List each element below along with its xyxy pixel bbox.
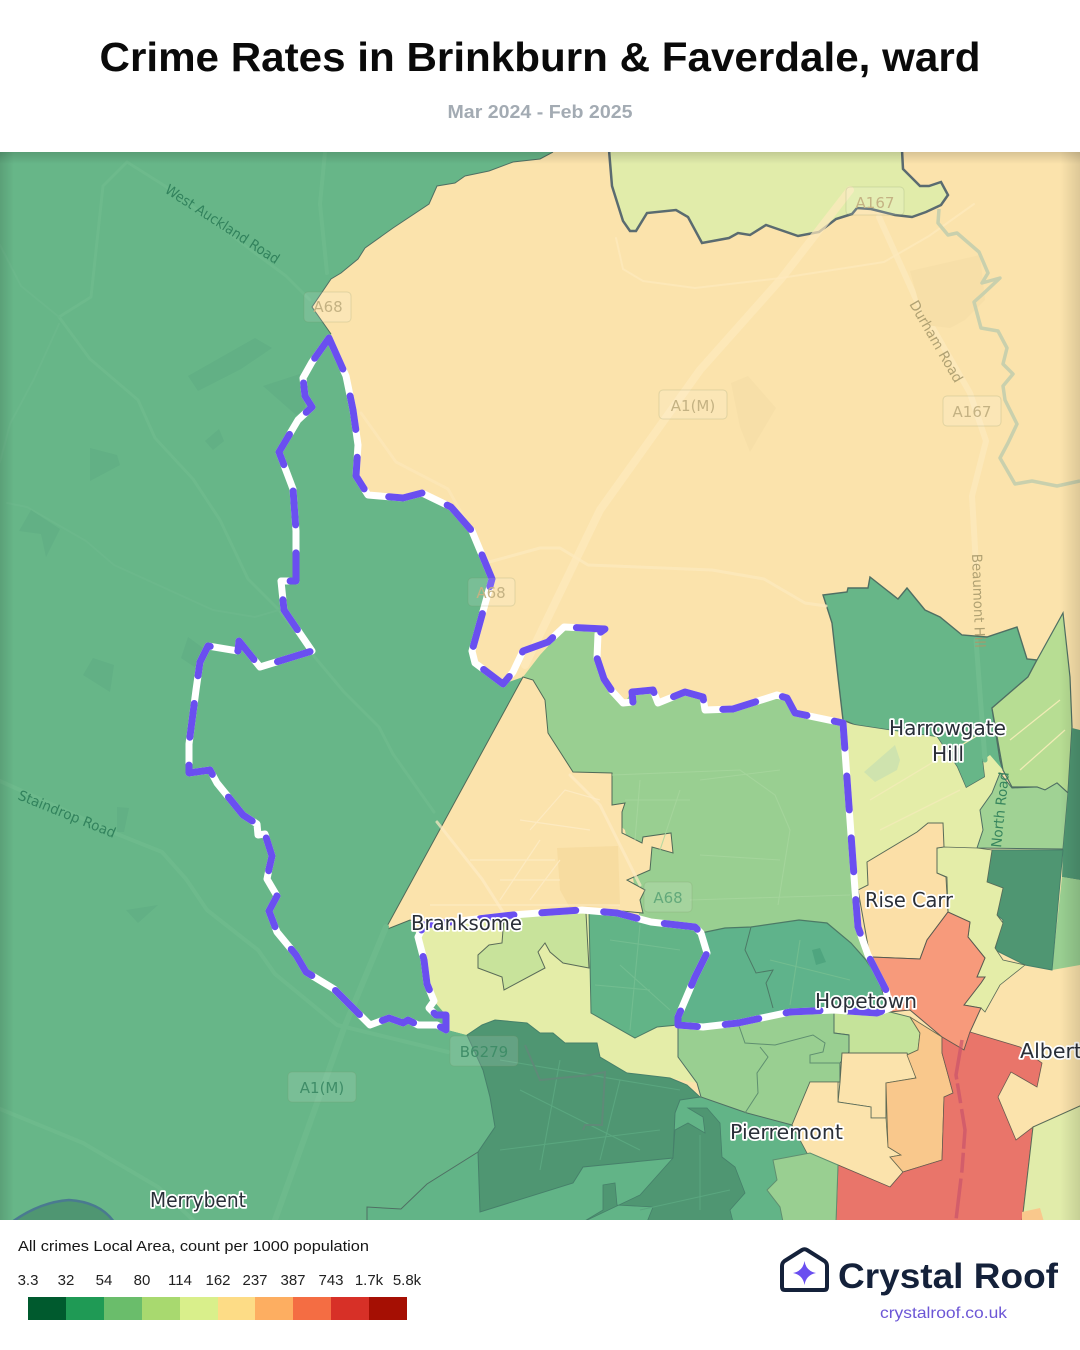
pale Branksome area	[418, 910, 697, 1083]
legend scale labels: 80	[134, 1272, 150, 1289]
peach block	[886, 1017, 953, 1172]
tan woods on cream	[916, 292, 935, 326]
cream Pierremont block	[792, 1082, 903, 1187]
mid green block	[589, 912, 707, 1038]
road shields: B6279	[460, 1043, 508, 1061]
south pale strip	[834, 1012, 920, 1055]
dark green lower area	[467, 1020, 700, 1212]
west green area	[0, 152, 553, 1220]
Pierremont north light green	[678, 1012, 849, 1125]
legend title: All crimes Local Area, count per 1000 population	[18, 1238, 369, 1255]
pale band near Rise Carr	[937, 847, 1025, 1012]
lower west sector edge	[367, 1152, 478, 1222]
river bottom left	[12, 1200, 114, 1222]
road labels: North Road	[989, 771, 1013, 848]
ward boundary	[189, 338, 890, 1030]
woods	[19, 338, 306, 923]
legend scale labels: 114	[168, 1272, 192, 1289]
Rise Carr cream	[858, 823, 948, 959]
road labels: Staindrop Road	[16, 788, 118, 842]
roads	[216, 186, 989, 1272]
north pale green area	[609, 150, 948, 243]
place labels: Hopetown	[815, 989, 917, 1013]
red town centre	[836, 1032, 1042, 1222]
legend scale labels: 1.7k	[355, 1272, 384, 1289]
North Road light green	[977, 773, 1068, 849]
logo wordmark: Crystal Roof	[838, 1257, 1058, 1296]
place labels: Branksome	[411, 911, 522, 935]
dark green east	[1062, 728, 1080, 880]
lower west sector	[480, 1098, 806, 1220]
orange polygon	[870, 912, 985, 1050]
subtitle: date range: Mar 2024 - Feb 2025	[448, 102, 632, 122]
logo icon: house with star	[782, 1249, 827, 1290]
road shields: A167	[856, 194, 894, 212]
green area northern edge	[312, 152, 553, 334]
legend scale labels: 32	[58, 1272, 74, 1289]
place labels: Rise Carr	[865, 888, 954, 912]
title: Crime Rates in Brinkburn & Faverdale, ward	[100, 34, 981, 80]
map vignette	[0, 152, 1080, 1220]
place labels: Albert	[1020, 1039, 1080, 1063]
legend scale labels: 743	[318, 1272, 344, 1289]
legend scale labels: 237	[242, 1272, 268, 1289]
Harrowgate green	[823, 577, 1037, 788]
pale Harrowgate south	[843, 722, 1003, 890]
road shields	[288, 187, 1001, 1102]
legend scale labels	[18, 1272, 422, 1289]
legend colour bar	[28, 1297, 407, 1320]
urban texture	[430, 790, 620, 905]
road shields: A1(M)	[300, 1079, 344, 1097]
stream in dark area	[525, 1045, 605, 1130]
road shields: A1(M)	[671, 397, 715, 415]
ward interior light green	[524, 630, 866, 960]
place labels	[150, 716, 1080, 1212]
railway line	[956, 1040, 965, 1220]
road shields: A167	[953, 403, 991, 421]
light green east	[992, 613, 1072, 793]
inner ward green	[678, 920, 890, 1027]
river	[938, 209, 1080, 486]
road labels: West Auckland Road	[162, 182, 282, 268]
place labels: Pierremont	[730, 1120, 843, 1144]
road shields: A68	[313, 298, 343, 316]
road shields: A68	[476, 584, 506, 602]
legend scale labels: 5.8k	[393, 1272, 422, 1289]
bottom light green	[767, 1153, 838, 1222]
place labels: Hill	[932, 742, 964, 766]
Harrowgate pond tint	[864, 745, 900, 782]
map	[0, 150, 1080, 1222]
road shields: A68	[653, 889, 683, 907]
road labels	[16, 182, 1013, 848]
cream south block	[838, 1053, 916, 1118]
place labels: Harrowgate	[889, 716, 1006, 740]
road labels: Beaumont Hill	[968, 554, 987, 648]
legend scale labels: 387	[280, 1272, 306, 1289]
legend scale labels: 3.3	[18, 1272, 38, 1289]
dark green lower middle	[583, 1108, 745, 1222]
cream triangle in ward	[385, 677, 673, 930]
east pale green	[1022, 1105, 1080, 1222]
legend scale labels: 54	[96, 1272, 112, 1289]
website link: crystalroof.co.uk	[880, 1305, 1008, 1322]
light green inclusion	[478, 912, 589, 990]
road labels: Durham Road	[906, 298, 965, 386]
place labels: Merrybent	[150, 1188, 246, 1212]
cream estate block	[557, 846, 620, 908]
legend scale labels: 162	[205, 1272, 231, 1289]
